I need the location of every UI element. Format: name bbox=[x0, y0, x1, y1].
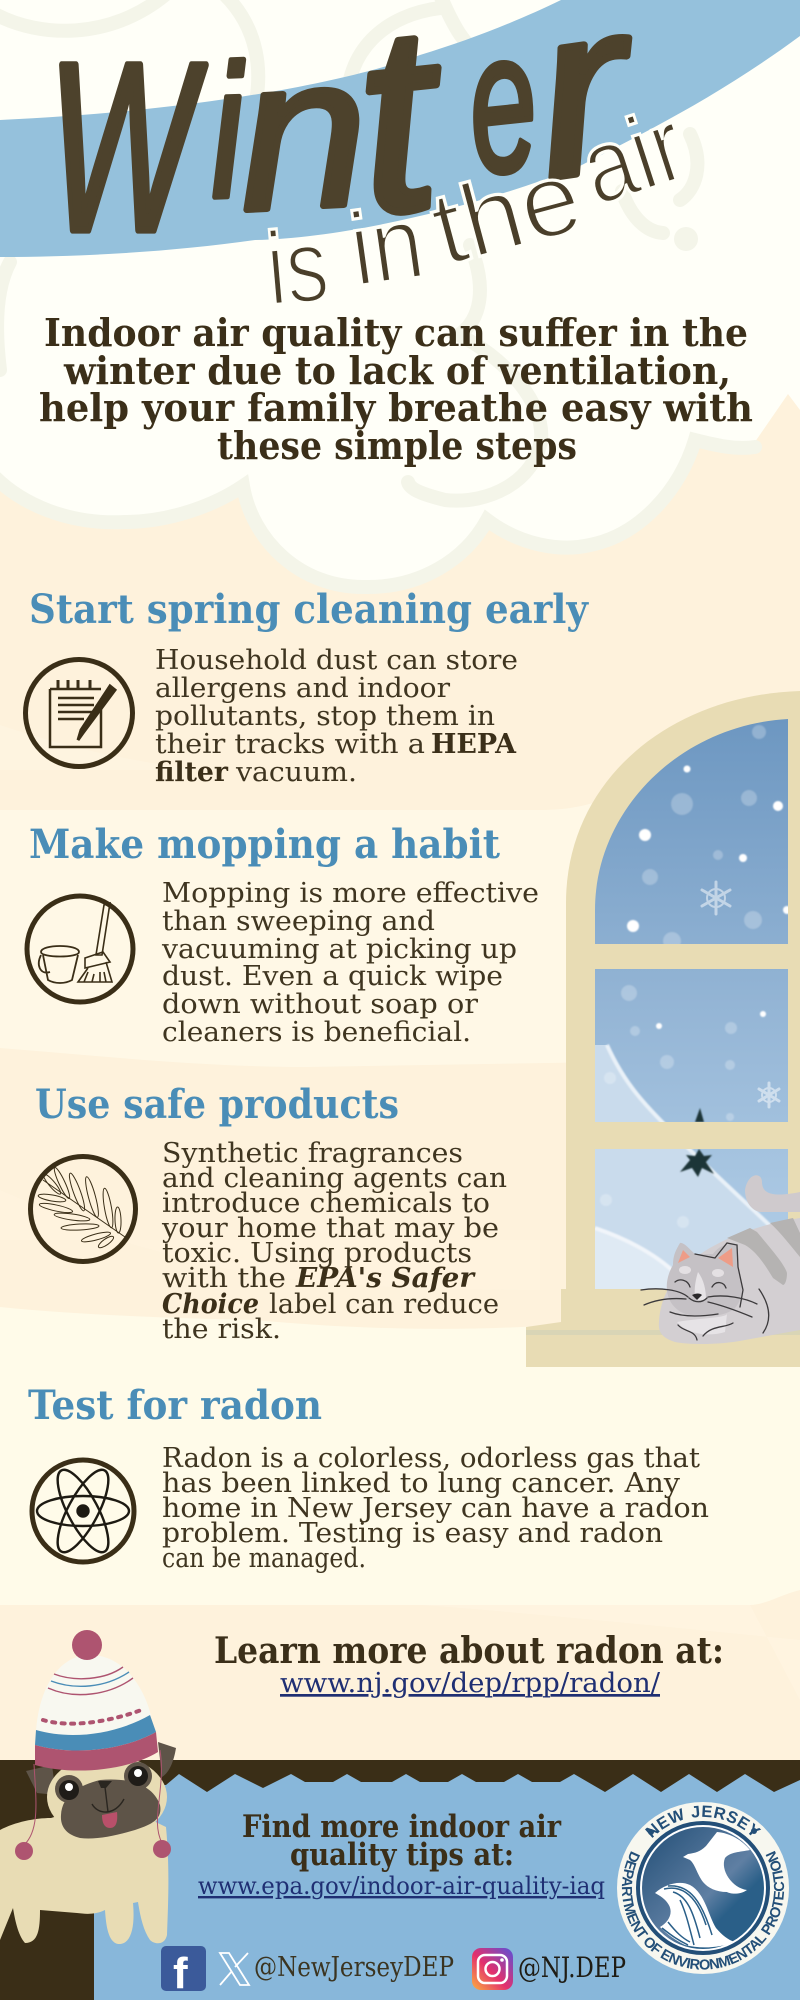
body text: problem. Testing is easy and radon bbox=[162, 1518, 663, 1549]
body text: Radon is a colorless, odorless gas that bbox=[162, 1443, 700, 1474]
body text: can be managed. bbox=[162, 1543, 366, 1574]
title: is in the air: in bbox=[343, 184, 431, 309]
intro text: Indoor air quality can suffer in the bbox=[44, 310, 748, 355]
title: Winter bbox=[48, 0, 654, 281]
background: blue swoosh band bbox=[0, 0, 800, 257]
body text: Mopping is more effective bbox=[162, 878, 539, 909]
icon: notepad and pencil bbox=[26, 660, 132, 766]
body text: the risk. bbox=[162, 1314, 281, 1345]
body text: has been linked to lung cancer. Any bbox=[162, 1468, 681, 1499]
body text: with the bbox=[162, 1263, 286, 1294]
link: epa: www.epa.gov/indoor-air-quality-iaq bbox=[198, 1872, 605, 1900]
find more callout: quality tips at: bbox=[290, 1837, 514, 1873]
title: Winter: i bbox=[206, 27, 250, 238]
body text bbox=[155, 645, 518, 788]
window illustration bbox=[526, 691, 800, 1367]
title: is in the air bbox=[262, 87, 698, 328]
logo: NJDEP seal: DEPARTMENT OF ENVIRONMENTAL PROTECTION bbox=[622, 1850, 784, 1970]
body text: vacuum. bbox=[235, 757, 357, 788]
icon: X bbox=[220, 1953, 249, 1985]
icon: facebook: f bbox=[173, 1949, 188, 1998]
logo: NJDEP seal: NEW JERSEY bbox=[645, 1806, 762, 1838]
icon: bucket and mop bbox=[27, 896, 133, 1002]
body text: HEPA bbox=[431, 729, 517, 760]
body text: introduce chemicals to bbox=[162, 1188, 490, 1219]
heading: Make mopping a habit bbox=[29, 821, 500, 868]
body text: vacuuming at picking up bbox=[161, 934, 517, 965]
body text bbox=[162, 1443, 709, 1574]
link: radon: www.nj.gov/dep/rpp/radon/ bbox=[280, 1668, 661, 1699]
body text bbox=[161, 878, 539, 1048]
body text: than sweeping and bbox=[162, 906, 435, 937]
learn more callout bbox=[214, 1630, 724, 1699]
body text: cleaners is beneficial. bbox=[162, 1017, 471, 1048]
title: Winter: n bbox=[233, 9, 373, 256]
title: is in the air: the bbox=[420, 138, 593, 288]
learn more callout: Learn more about radon at: bbox=[214, 1630, 724, 1672]
heading: Test for radon bbox=[28, 1382, 322, 1429]
icon: facebook bbox=[161, 1946, 206, 1998]
body text: down without soap or bbox=[162, 989, 478, 1020]
footer: dark strip bbox=[0, 1760, 800, 2000]
heading: Use safe products bbox=[35, 1081, 399, 1128]
body text bbox=[161, 1138, 507, 1345]
section: Start spring cleaning early bbox=[29, 586, 590, 788]
title: is in the air: is bbox=[262, 207, 333, 328]
body text: Synthetic fragrances bbox=[162, 1138, 463, 1169]
body text: Household dust can store bbox=[155, 645, 518, 676]
icon: leaf sprig bbox=[30, 1156, 136, 1262]
body text: filter bbox=[155, 757, 229, 788]
heading: Start spring cleaning early bbox=[29, 586, 590, 633]
cat illustration bbox=[641, 1175, 800, 1344]
section: Make mopping a habit bbox=[29, 821, 539, 1048]
illustration: pug in a hat bbox=[0, 1630, 176, 1944]
body text: and cleaning agents can bbox=[162, 1163, 507, 1194]
background: peach and cream waves bbox=[0, 394, 800, 1760]
body text: Choice bbox=[162, 1289, 259, 1320]
intro text: these simple steps bbox=[217, 423, 577, 468]
social handle: X: @NewJerseyDEP bbox=[254, 1952, 454, 1983]
social handle: instagram: @NJ.DEP bbox=[518, 1951, 626, 1984]
body text: toxic. Using products bbox=[162, 1238, 472, 1269]
body text: their tracks with a bbox=[155, 729, 425, 760]
body text: label can reduce bbox=[269, 1289, 499, 1320]
find more callout bbox=[198, 1809, 605, 1900]
icon: instagram bbox=[472, 1948, 513, 1990]
title: is in the air: air bbox=[567, 87, 698, 228]
icon: atom bbox=[32, 1460, 134, 1562]
background: cloud bbox=[0, 0, 755, 587]
section: Test for radon bbox=[28, 1382, 709, 1574]
find more callout: Find more indoor air bbox=[242, 1809, 562, 1845]
footer: blue zigzag panel bbox=[94, 1774, 800, 2000]
body text: dust. Even a quick wipe bbox=[162, 961, 503, 992]
section: Use safe products bbox=[35, 1081, 507, 1345]
body text: allergens and indoor bbox=[155, 673, 450, 704]
title: Winter: W bbox=[48, 13, 207, 281]
body text: pollutants, stop them in bbox=[155, 701, 495, 732]
intro text: help your family breathe easy with bbox=[39, 385, 753, 430]
body text: home in New Jersey can have a radon bbox=[162, 1493, 709, 1524]
body text: EPA's Safer bbox=[295, 1263, 476, 1294]
intro text bbox=[39, 310, 753, 468]
intro text: winter due to lack of ventilation, bbox=[63, 348, 731, 393]
body text: your home that may be bbox=[161, 1213, 499, 1244]
